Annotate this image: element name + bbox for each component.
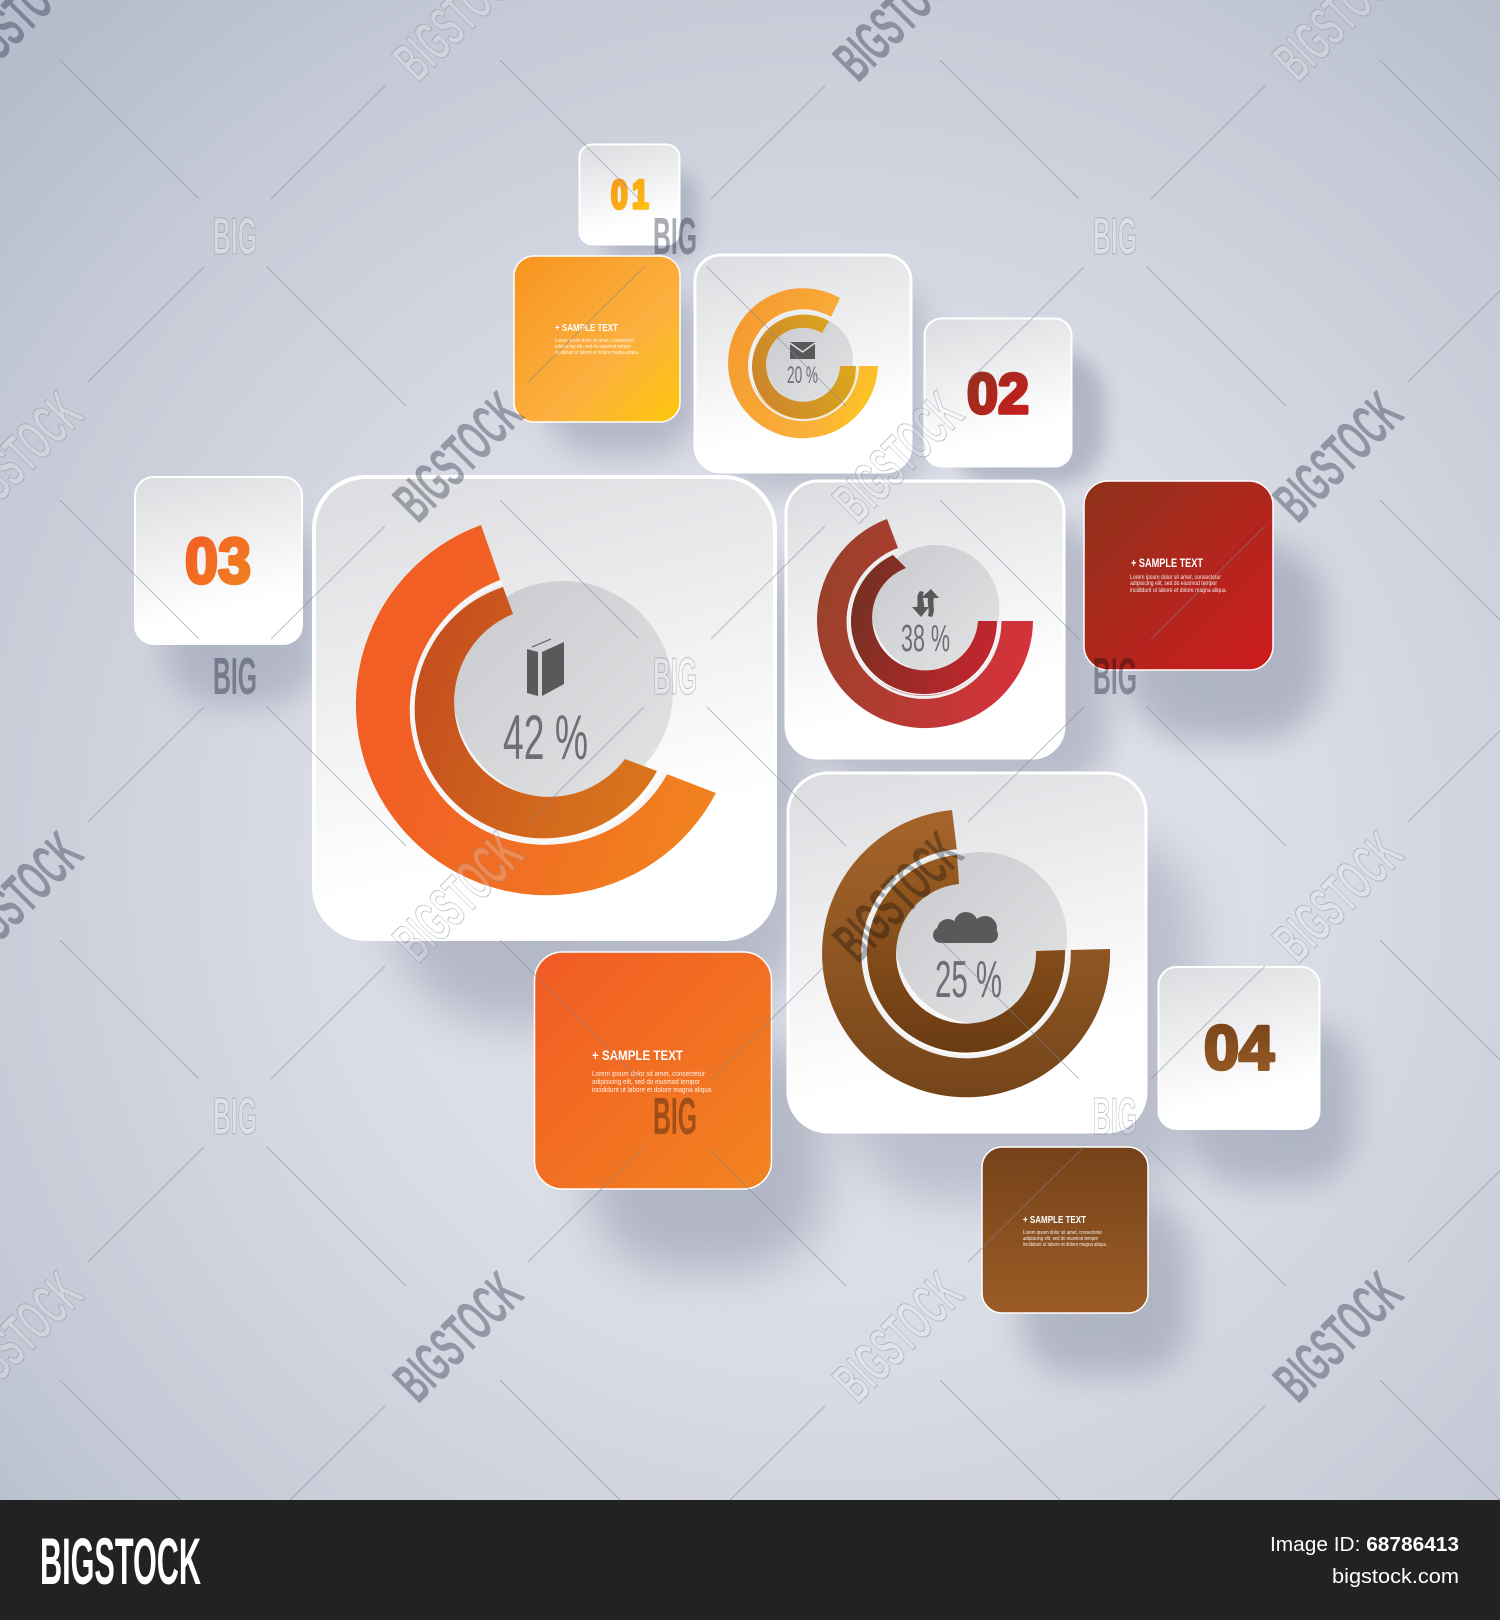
panel: number 02: [924, 318, 1072, 466]
panel: number 01: [580, 144, 680, 244]
centre disc: [895, 852, 1067, 1024]
separator: [863, 851, 1069, 1057]
watermarks: BIG: [213, 208, 1137, 1146]
sample paragraph: adipisicing elit, sed do eiusmod tempor: [1130, 581, 1217, 587]
footer bar: BIGSTOCK: [40, 1524, 201, 1598]
separator: [749, 311, 858, 420]
value 20 percent: 20 %: [787, 362, 818, 389]
icon: envelope: [790, 342, 815, 359]
separator: [848, 550, 1000, 697]
sample paragraph: [555, 338, 639, 356]
watermarks: BIG: BIG: [653, 648, 697, 706]
centre disc: [453, 581, 673, 801]
watermarks: BIGSTOCK: BIGSTOCK: [381, 380, 535, 534]
inner ring: [851, 555, 997, 694]
panel: 20 percent donut: [695, 255, 911, 472]
sample paragraph: Lorem ipsum dolor sit amet, consectetur: [1130, 575, 1221, 581]
infographic canvas: BIG: [1093, 1088, 1137, 1146]
icon: cloud: [933, 912, 998, 943]
centre disc: [765, 316, 853, 404]
sample paragraph: adipisicing elit, sed do eiusmod tempor: [555, 344, 631, 350]
value 42 percent: 42 %: [503, 703, 588, 773]
sample text heading: + SAMPLE TEXT: [1131, 558, 1203, 570]
inner ring: [415, 587, 657, 838]
sample paragraph: Lorem ipsum dolor sit amet, consectetur: [555, 338, 634, 344]
number 04: 04: [1204, 1014, 1275, 1083]
watermarks: BIGSTOCK: BIGSTOCK: [381, 820, 535, 974]
image id: Image ID: 68786413: [1270, 1534, 1459, 1556]
panel: 25 percent donut: [788, 773, 1146, 1132]
sample paragraph: [592, 1069, 713, 1094]
sample paragraph: incididunt ut labore et dolore magna aliqua.: [1023, 1242, 1107, 1248]
sample paragraph: adipisicing elit, sed do eiusmod tempor: [592, 1077, 700, 1086]
outer ring: [817, 519, 1033, 728]
value 25 percent: 25 %: [935, 951, 1002, 1009]
watermarks: BIGSTOCK: BIGSTOCK: [821, 380, 975, 534]
watermarks: BIGSTOCK: BIGSTOCK: [821, 1260, 975, 1414]
footer bar: [0, 1500, 1500, 1620]
infographic canvas: BIG: [1093, 208, 1137, 266]
value 38 percent: 38 %: [901, 618, 950, 660]
sample paragraph: [1023, 1230, 1107, 1248]
watermarks: BIGSTOCK: BIGSTOCK: [821, 820, 975, 974]
number 01: 01: [611, 173, 649, 217]
outer ring: [728, 288, 878, 438]
panel: brown sample text card: [982, 1147, 1148, 1313]
panel: red sample text card: [1084, 481, 1273, 670]
panel: yellow sample text card: [514, 256, 680, 422]
watermarks: BIG: BIG: [213, 208, 257, 266]
watermarks: BIG: BIG: [653, 1088, 697, 1146]
panel: orange sample text card: [534, 952, 772, 1189]
sample paragraph: [1130, 575, 1227, 594]
infographic canvas: BIG: [1093, 648, 1137, 706]
card shadows: [165, 170, 1355, 1375]
outer ring: [822, 810, 1110, 1097]
watermarks: BIGSTOCK: BIGSTOCK: [381, 1260, 535, 1414]
sample text heading: + SAMPLE TEXT: [592, 1048, 684, 1063]
sample paragraph: Lorem ipsum dolor sit amet, consectetur: [592, 1069, 705, 1078]
sample paragraph: adipisicing elit, sed do eiusmod tempor: [1023, 1236, 1098, 1242]
sample paragraph: incididunt ut labore et dolore magna aliqua.: [555, 350, 639, 356]
sample paragraph: Lorem ipsum dolor sit amet, consectetur: [1023, 1230, 1102, 1236]
sample paragraph: incididunt ut labore et dolore magna aliqua.: [1130, 588, 1227, 594]
watermarks: BIG: BIG: [653, 208, 697, 266]
watermarks: BIG: BIG: [213, 648, 257, 706]
icon: exchange arrows: [912, 589, 939, 617]
panel: 38 percent donut: [786, 481, 1064, 758]
sample text heading: + SAMPLE TEXT: [555, 322, 618, 334]
outer ring: [356, 525, 716, 895]
inner ring: [752, 315, 856, 419]
number 03: 03: [185, 525, 251, 597]
panel: number 03: [135, 477, 302, 644]
number 02: 02: [967, 362, 1029, 426]
watermarks: BIG: BIG: [213, 1088, 257, 1146]
separator: [414, 582, 665, 842]
site url: bigstock.com: [1332, 1566, 1459, 1588]
panel: 42 percent donut: [314, 477, 775, 939]
centre disc: [872, 545, 1000, 673]
icon: book: [527, 639, 564, 696]
sample paragraph: incididunt ut labore et dolore magna aliqua.: [592, 1085, 713, 1094]
inner ring: [867, 855, 1065, 1053]
panel: number 04: [1158, 967, 1320, 1129]
sample text heading: + SAMPLE TEXT: [1023, 1215, 1086, 1226]
